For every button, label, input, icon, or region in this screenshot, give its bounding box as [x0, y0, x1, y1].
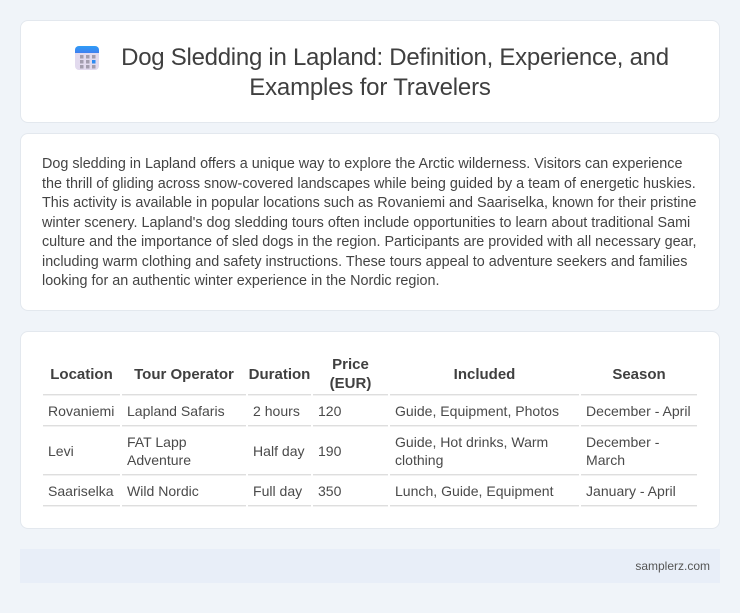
table row: Levi: Guide, Hot drinks, Warm [395, 434, 548, 450]
text block: description: the thrill of gliding across snow-covered landscapes while being guided by a team of energetic huskies. [42, 176, 696, 192]
table row: Levi: December - [586, 434, 659, 450]
text block: description: winter scenery. Lapland's dog sledding tours often include opportunities to learn about traditional Sami [42, 214, 690, 230]
title [121, 44, 669, 101]
table header row: Duration [249, 366, 310, 383]
title: Examples for Travelers [249, 74, 491, 101]
table row: Saariselka: Lunch, Guide, Equipment [395, 483, 554, 499]
table row: Saariselka: 350 [318, 483, 341, 499]
table row: Levi: clothing [395, 452, 443, 468]
table row: Levi: Half day [253, 443, 305, 459]
table row: Rovaniemi: December - April [586, 403, 691, 419]
text block: description: Dog sledding in Lapland offers a unique way to explore the Arctic wilderness. Visitors can experience [42, 156, 682, 172]
table row: Levi: FAT Lapp [127, 434, 187, 450]
table row: Levi: Levi [48, 443, 74, 459]
table header row: Tour Operator [134, 366, 234, 383]
table row: Rovaniemi: 2 hours [253, 403, 300, 419]
table header row [50, 356, 666, 392]
table header row: Price [332, 356, 369, 373]
table row: Saariselka: Saariselka [48, 483, 114, 499]
panel: description card [20, 133, 720, 311]
table row: Saariselka: Wild Nordic [127, 483, 199, 499]
table row: Rovaniemi: 120 [318, 403, 341, 419]
icon: calendar [75, 46, 99, 70]
table row: Rovaniemi: Lapland Safaris [127, 403, 225, 419]
table row: Rovaniemi: Guide, Equipment, Photos [395, 403, 559, 419]
table header row: (EUR) [330, 375, 371, 392]
text block: description [42, 156, 697, 289]
table header row: Season [612, 366, 666, 383]
table: tours [43, 356, 697, 507]
text block: description: including warm clothing and safety instructions. These tours appeal to adventure seekers and families [42, 254, 687, 270]
text block: description: This activity is available in popular locations such as Rovaniemi and Saariselka, known for their pristine [42, 195, 696, 211]
panel: title card [20, 20, 720, 123]
table header row: Location [50, 366, 113, 383]
table row: Saariselka [48, 483, 676, 499]
table row: Levi: Adventure [127, 452, 191, 468]
text block: description: looking for an authentic winter experience in the Nordic region. [42, 273, 440, 289]
table row: Saariselka: January - April [586, 483, 676, 499]
table row: Rovaniemi [48, 403, 691, 419]
table row: Levi: 190 [318, 443, 341, 459]
table header row: Included [454, 366, 515, 383]
footer bar [20, 549, 720, 583]
table row: Levi: March [586, 452, 625, 468]
title: Dog Sledding in Lapland: Definition, Experience, and [121, 44, 669, 71]
table row: Saariselka: Full day [253, 483, 302, 499]
panel: table card [20, 331, 720, 529]
text block: description: culture and the importance of sled dogs in the region. Participants are provided with all necessary gear, [42, 234, 697, 250]
table row: Levi [48, 434, 659, 468]
table row: Rovaniemi: Rovaniemi [48, 403, 114, 419]
footer credit: samplerz.com [635, 559, 710, 573]
